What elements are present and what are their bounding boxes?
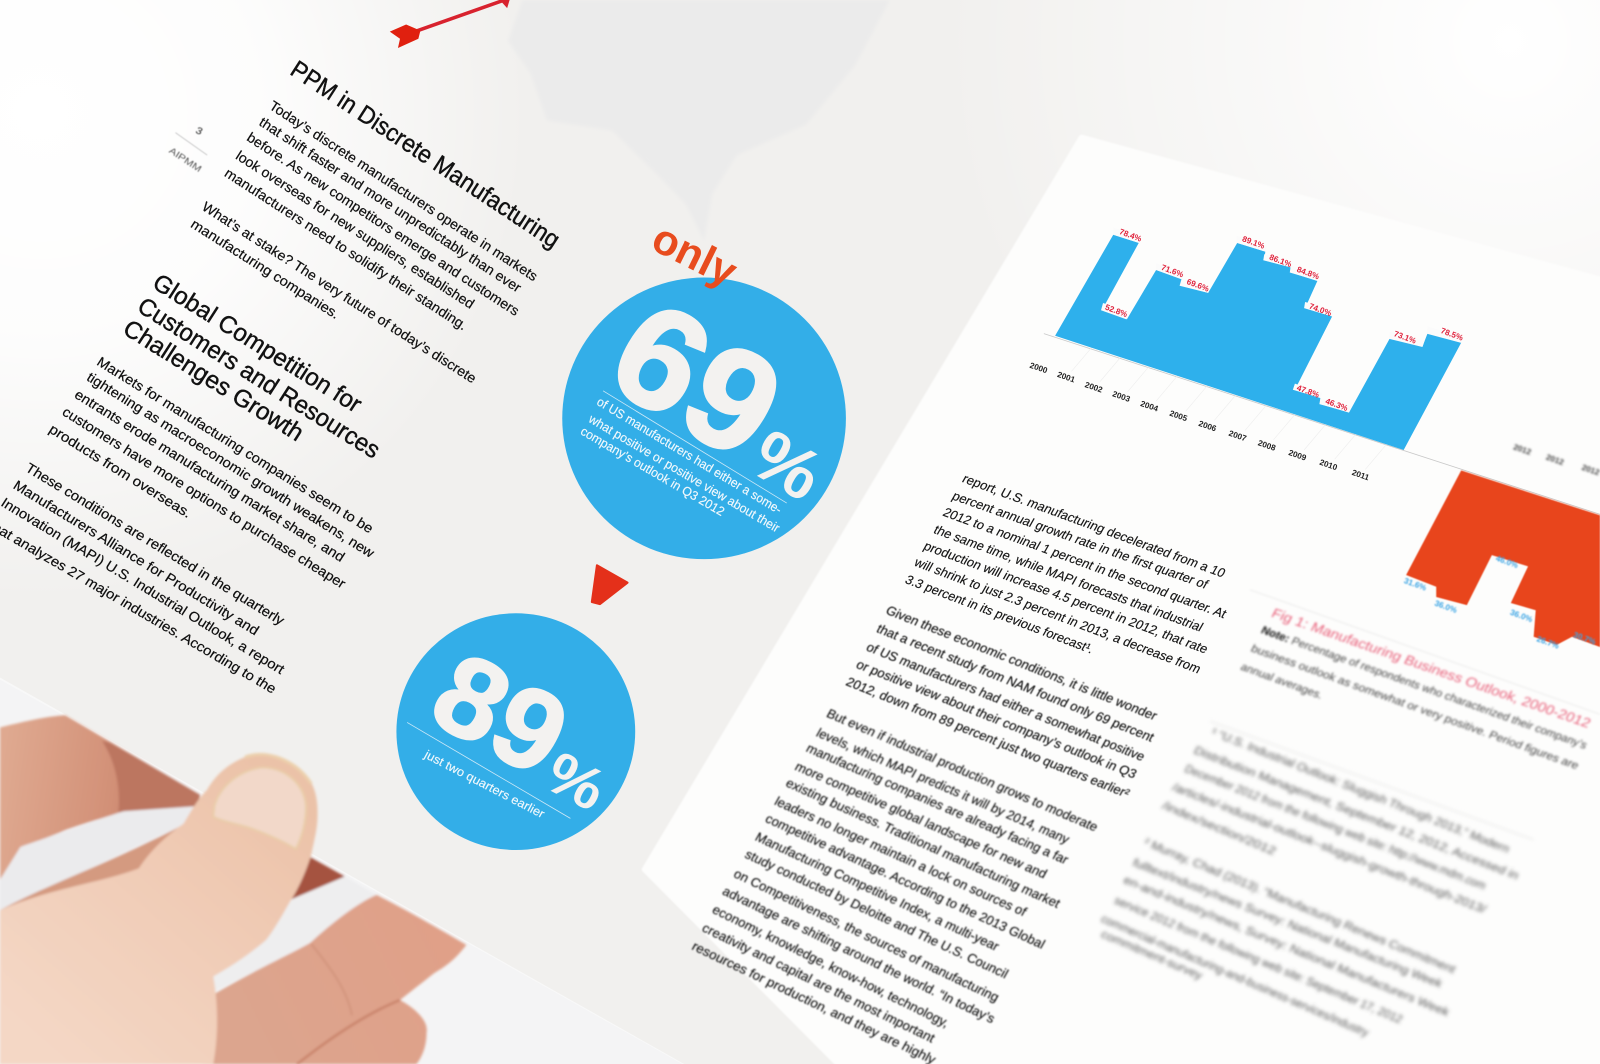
lower fingers [204,895,466,1064]
text: PPM in Discrete Manufacturing [286,55,565,253]
text: customers have more options to purchase cheaper [59,404,348,592]
value labels: 30.7% [1572,630,1598,647]
text: that analyzes 27 major industries. According to the [0,517,279,697]
year axis: 2011 [1351,468,1371,482]
blue bar chart [1029,227,1600,514]
text: These conditions are reflected in the quarterly [23,460,288,628]
paragraph: intro [188,98,540,386]
stat value 89: 89 [413,628,588,800]
folio [167,126,207,175]
folio: AIPMM [167,146,203,175]
value labels: 86.1% [1268,253,1294,269]
text: Customers and Resources [133,292,385,464]
value labels: 36.0% [1433,599,1459,615]
percent sign: % [534,740,616,824]
value labels: 46.3% [1324,397,1350,413]
value labels: 84.8% [1296,265,1321,282]
thumbnail [213,767,306,849]
value labels: 78.5% [1439,326,1465,343]
arrow [390,0,510,48]
icon: hand [0,715,466,1064]
footnotes: /index/section/2012 [1160,799,1279,858]
percent sign: % [738,413,837,516]
index finger [0,715,200,880]
dark triangle [286,857,345,902]
text: entrants erode manufacturing market share, and [72,386,348,565]
value labels: 71.6% [1160,263,1185,280]
stat value 69: 69 [586,269,808,490]
year axis: 2007 [1228,429,1248,443]
year axis [1512,442,1600,477]
text: Global Competition for [148,269,367,418]
stat caption: just two quarters earlier [421,748,547,822]
paragraph: conditions [0,460,288,697]
stat circle: 69% [562,269,846,559]
bars [1406,470,1600,647]
gap beside thumb [213,877,377,992]
stat circle: 69%: what positive or positive view about their [586,411,782,535]
value labels: 73.1% [1393,329,1418,346]
value labels: 69.6% [1185,277,1211,294]
stat circle: 89% [396,613,635,850]
text: Innovation (MAPI) U.S. Industrial Outlook, a report [0,495,287,677]
text: look overseas for new suppliers, established [233,148,477,312]
text: But even if industrial production grows to moderate [824,706,1101,834]
stat circle: 69%: of US manufacturers had either a some- [594,395,784,517]
year axis: 2012 [1545,453,1565,467]
value labels [1403,554,1598,651]
paragraph: markets [46,354,377,592]
year axis: 2000 [1029,361,1049,375]
bars [1055,235,1461,450]
footnotes [1099,721,1534,1039]
palm and thumb [0,756,318,1064]
year axis: 2012 [1512,442,1533,457]
text: Markets for manufacturing companies seem to be [94,354,376,536]
year axis: 2001 [1056,370,1077,385]
heading: global competition [118,269,385,464]
map silhouette [508,0,890,241]
text: Today’s discrete manufacturers operate in markets [267,98,540,284]
gap behind thumb [0,806,197,910]
year axis: 2002 [1084,380,1104,395]
year axis: 2008 [1257,438,1277,453]
figure caption [1238,590,1600,771]
text: manufacturers need to solidify their standing. [222,166,470,333]
year axis: 2004 [1139,399,1160,414]
back of middle finger [0,824,235,910]
footnotes: commitment-survey [1099,927,1206,983]
value labels: 26.7% [1535,634,1561,651]
text: manufacturing companies are already facing a far [804,741,1071,867]
year axis [1029,361,1371,482]
figure caption: annual averages. [1238,662,1324,702]
value labels: 31.6% [1403,576,1428,593]
body column: report [903,471,1229,676]
year axis: 2010 [1318,458,1339,472]
text: before. As new competitors emerge and customers [244,129,522,319]
year axis: 2009 [1287,448,1308,463]
label: only: only [645,214,745,297]
paragraph: markets: products from overseas. [46,421,195,521]
text: What’s at stake? The very future of today’s discrete [199,199,479,386]
text: tightening as macroeconomic growth weakens, new [84,369,377,561]
orange bar chart [1403,442,1600,651]
value labels: 74.0% [1308,302,1333,318]
year axis: 2003 [1111,389,1132,404]
text: more competitive global landscape for new and [792,759,1050,881]
value labels: 78.4% [1118,227,1144,244]
value labels: 47.8% [1296,383,1321,400]
stat caption: company’s outlook in Q3 2012 [578,424,727,519]
text: Manufacturers Alliance for Productivity and [10,478,262,639]
value labels: 52.8% [1104,303,1129,319]
folio: 3 [194,126,204,138]
right page panel [645,138,1600,1064]
body column: given [843,603,1160,801]
value labels: 46.0% [1495,554,1520,570]
value labels [1101,227,1465,413]
icon: down triangle [592,565,628,604]
body column: but even [689,706,1101,1064]
year axis: 2006 [1197,419,1218,434]
text: levels, which MAPI predicts it will by 2014, many [814,725,1072,847]
paragraph: intro: manufacturing companies. [188,217,342,322]
background below page [0,680,683,1064]
heading: global competition: Challenges Growth [118,315,308,447]
body column: report: 3.3 percent in its previous forecast¹. [903,573,1096,656]
value labels: 89.1% [1241,234,1267,251]
text: that shift faster and more unpredictably than ever [256,114,524,295]
stat caption [578,395,784,535]
value labels: 36.0% [1509,608,1534,624]
year axis: 2005 [1168,409,1189,423]
